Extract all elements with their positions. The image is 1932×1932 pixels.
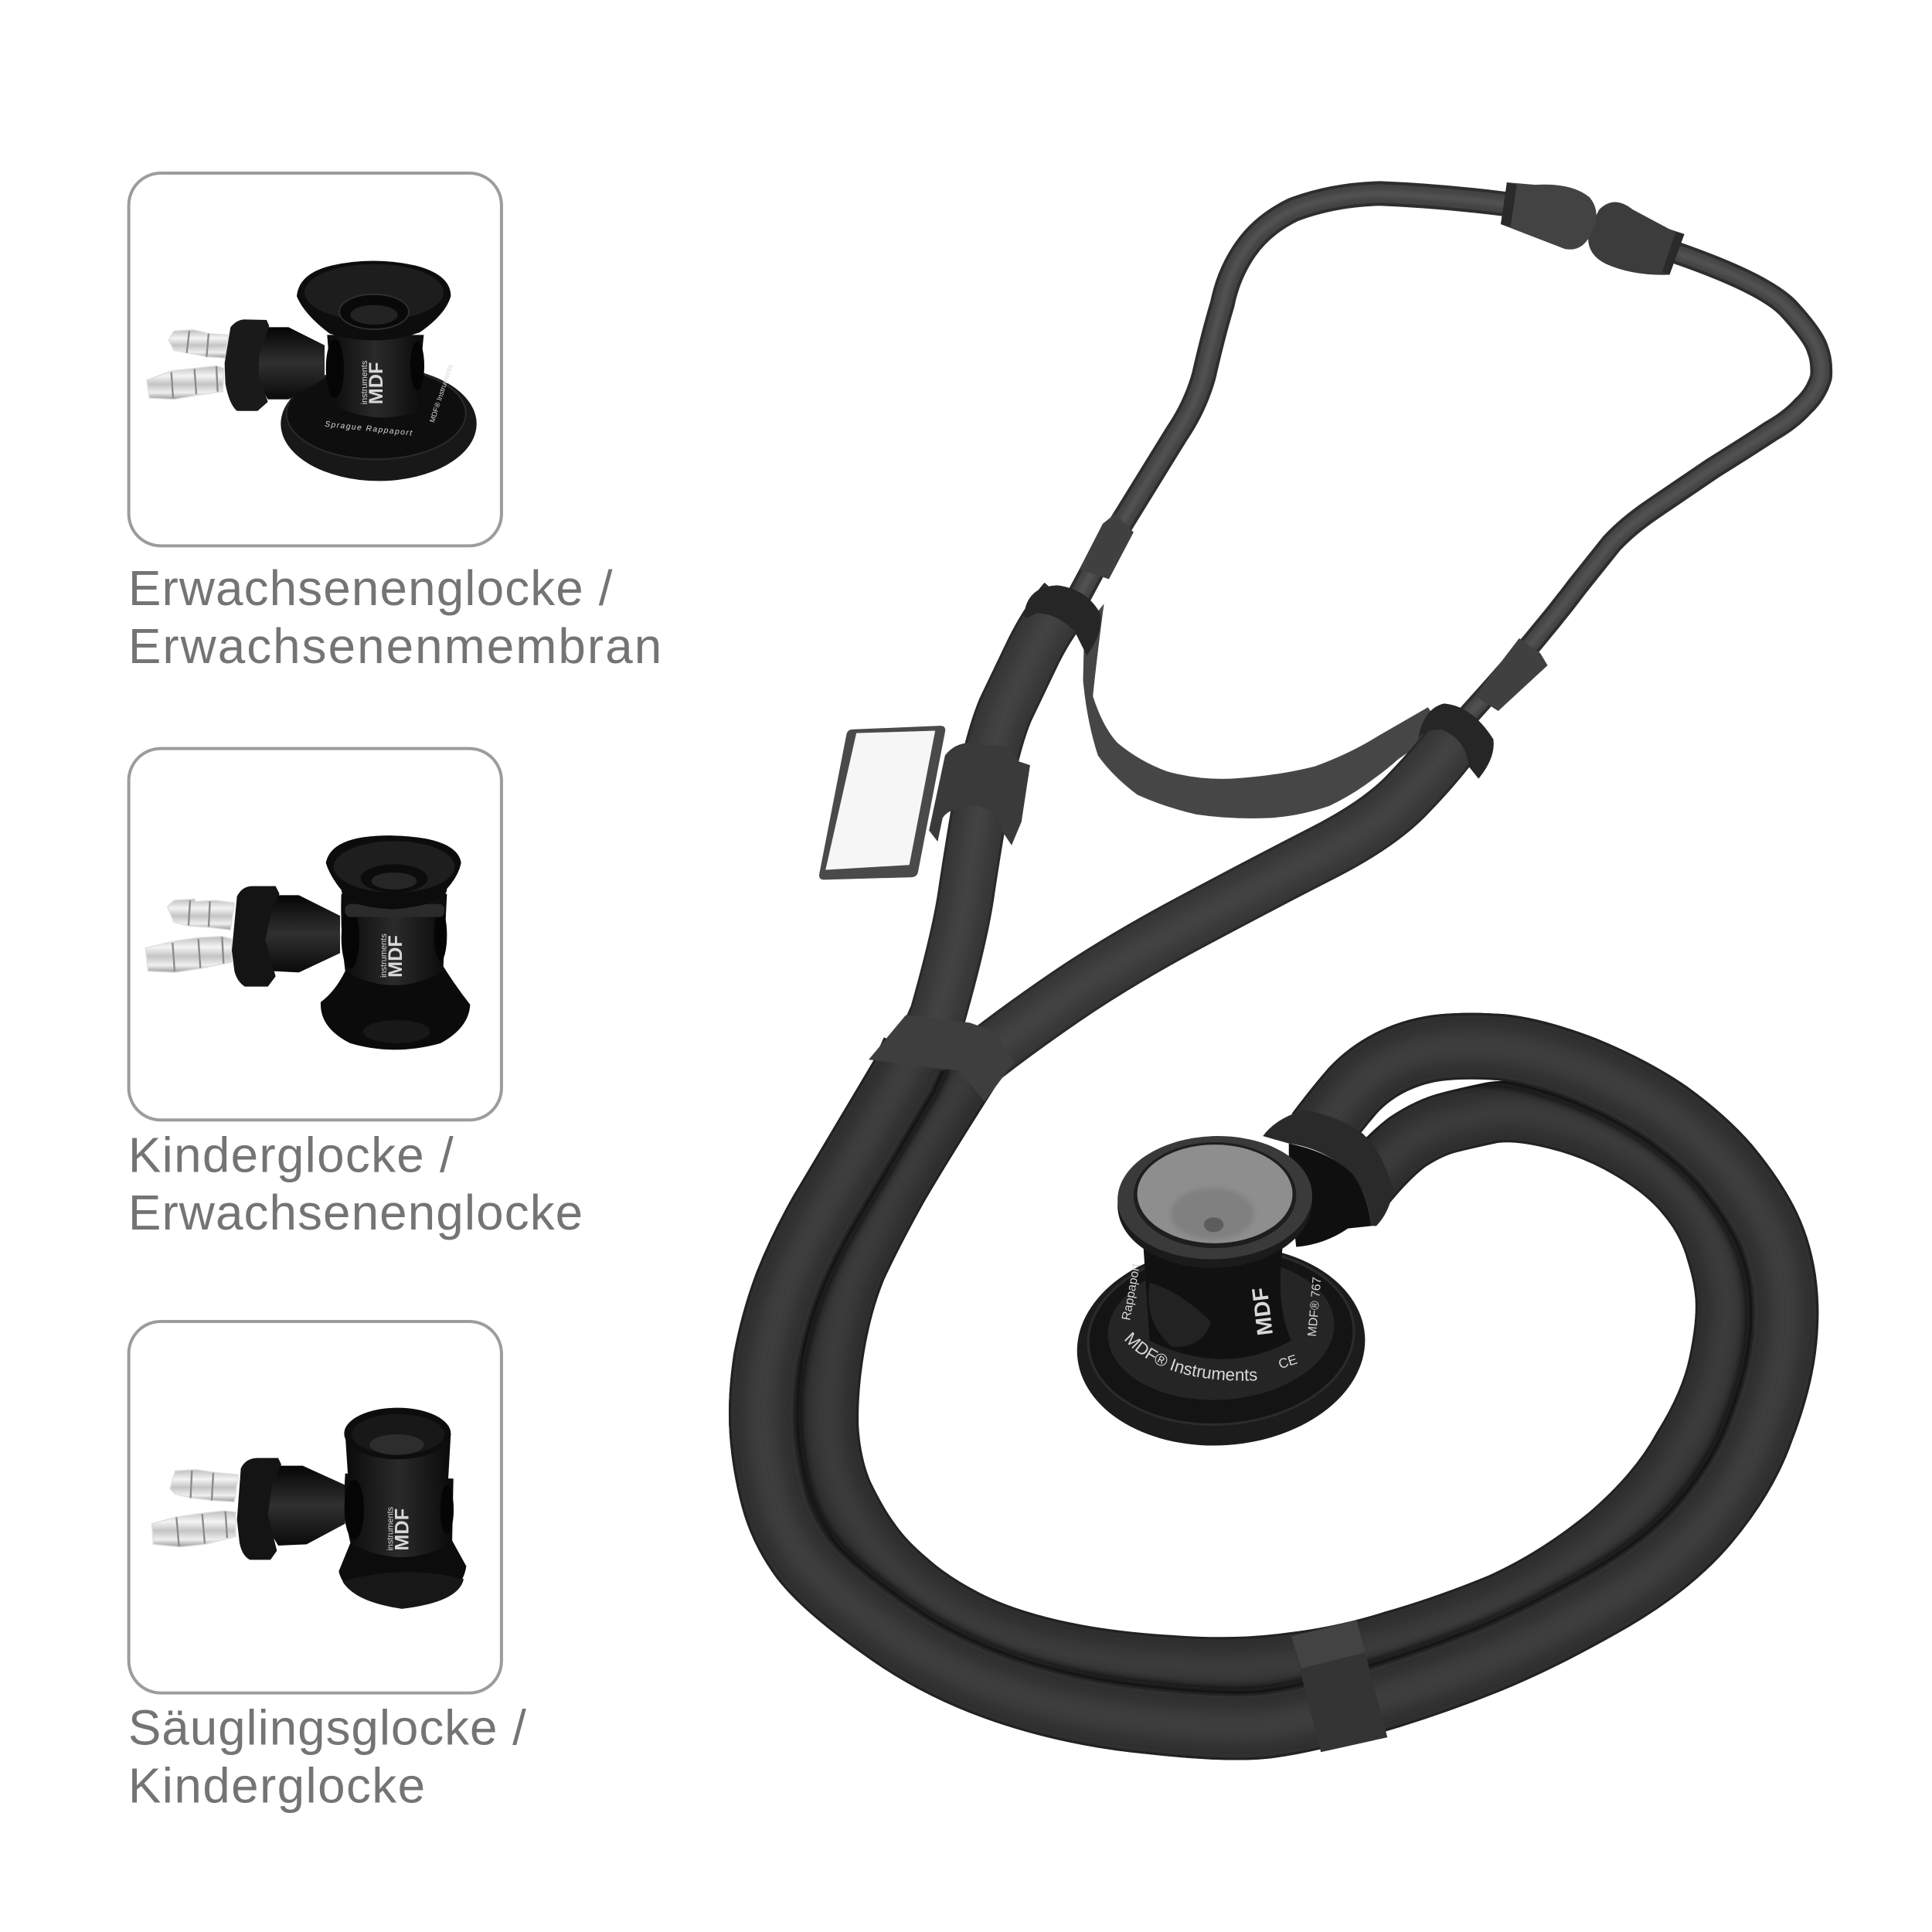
- stem logo subtitle: instruments: [386, 1506, 395, 1551]
- panel frame: [129, 173, 502, 546]
- headset spring junction: [1501, 182, 1685, 275]
- panel frame: [129, 749, 502, 1120]
- caption: pediatric bell / adult bell: Kinderglocke /: [128, 1127, 454, 1182]
- upper right connector: [1418, 703, 1494, 779]
- binaural sleeves: [1080, 514, 1548, 711]
- stem logo: MDF: [1248, 1286, 1278, 1337]
- stem logo: MDF: [385, 935, 406, 978]
- caption: infant bell / pediatric bell: Kinderglocke: [128, 1758, 425, 1814]
- upper left connector: [1024, 585, 1100, 655]
- bottom clip: [1291, 1621, 1387, 1752]
- flat spring band: [1083, 604, 1441, 818]
- neck: [1289, 1144, 1372, 1247]
- icon: pediatric chestpiece: [145, 835, 470, 1049]
- stethoscope: [762, 182, 1821, 1752]
- stem logo: MDF: [391, 1509, 413, 1551]
- diaphragm: [1138, 1145, 1293, 1243]
- base engraving: MDF Instruments: MDF® Instruments: [428, 363, 454, 423]
- panel: adult bell / adult diaphragm: [129, 173, 502, 546]
- shadow between tubes: [762, 1046, 1785, 1726]
- caption: pediatric bell / adult bell: [128, 1127, 583, 1240]
- outer rubber tube: [762, 1046, 1785, 1726]
- caption: pediatric bell / adult bell: Erwachsenenglocke: [128, 1185, 583, 1240]
- base engraving: Sprague Rappaport: Sprague Rappaport: [325, 420, 413, 438]
- engraved text: CE: CE: [1277, 1352, 1299, 1372]
- icon: infant chestpiece: [152, 1408, 466, 1609]
- upper left rubber tube: [918, 601, 1066, 1060]
- panel frame: [129, 1321, 502, 1693]
- caption: infant bell / pediatric bell: [128, 1700, 526, 1814]
- caption: infant bell / pediatric bell: Säuglingsglocke /: [128, 1700, 526, 1756]
- stem: [1144, 1247, 1291, 1359]
- engraved text: model: MDF® 767: [1306, 1277, 1325, 1337]
- tube gap filler: [796, 1097, 1758, 1651]
- tube connector collar: [1263, 1111, 1393, 1226]
- right binaural tube: [1449, 253, 1821, 736]
- panel: infant bell / pediatric bell: [129, 1321, 502, 1693]
- inner rubber tube: [828, 1045, 1726, 1668]
- chestpiece: [1077, 1111, 1391, 1445]
- lower Y clip: [869, 1015, 1014, 1101]
- caption: adult bell / adult diaphragm: [128, 560, 662, 674]
- stem logo subtitle: instruments: [360, 360, 369, 404]
- engraved text: Rappaport: Rappaport: [1120, 1262, 1143, 1321]
- base disc: [1070, 1236, 1372, 1455]
- engraved text: MDF Instruments: [1124, 1339, 1267, 1381]
- caption: adult bell / adult diaphragm: Erwachsenenglocke /: [128, 560, 613, 616]
- panel: pediatric bell / adult bell: [129, 749, 502, 1120]
- icon: adult chestpiece: [147, 261, 477, 481]
- stem logo subtitle: instruments: [379, 934, 389, 978]
- stem logo: MDF: [366, 362, 387, 404]
- upper right rubber tube: [968, 736, 1458, 1070]
- name tag with clip: [819, 726, 1030, 879]
- chestpiece: MDF® Instruments: [1124, 1332, 1257, 1381]
- caption: adult bell / adult diaphragm: Erwachsenenmembran: [128, 618, 662, 674]
- left binaural tube: [1070, 193, 1509, 614]
- head rim: [1115, 1136, 1315, 1271]
